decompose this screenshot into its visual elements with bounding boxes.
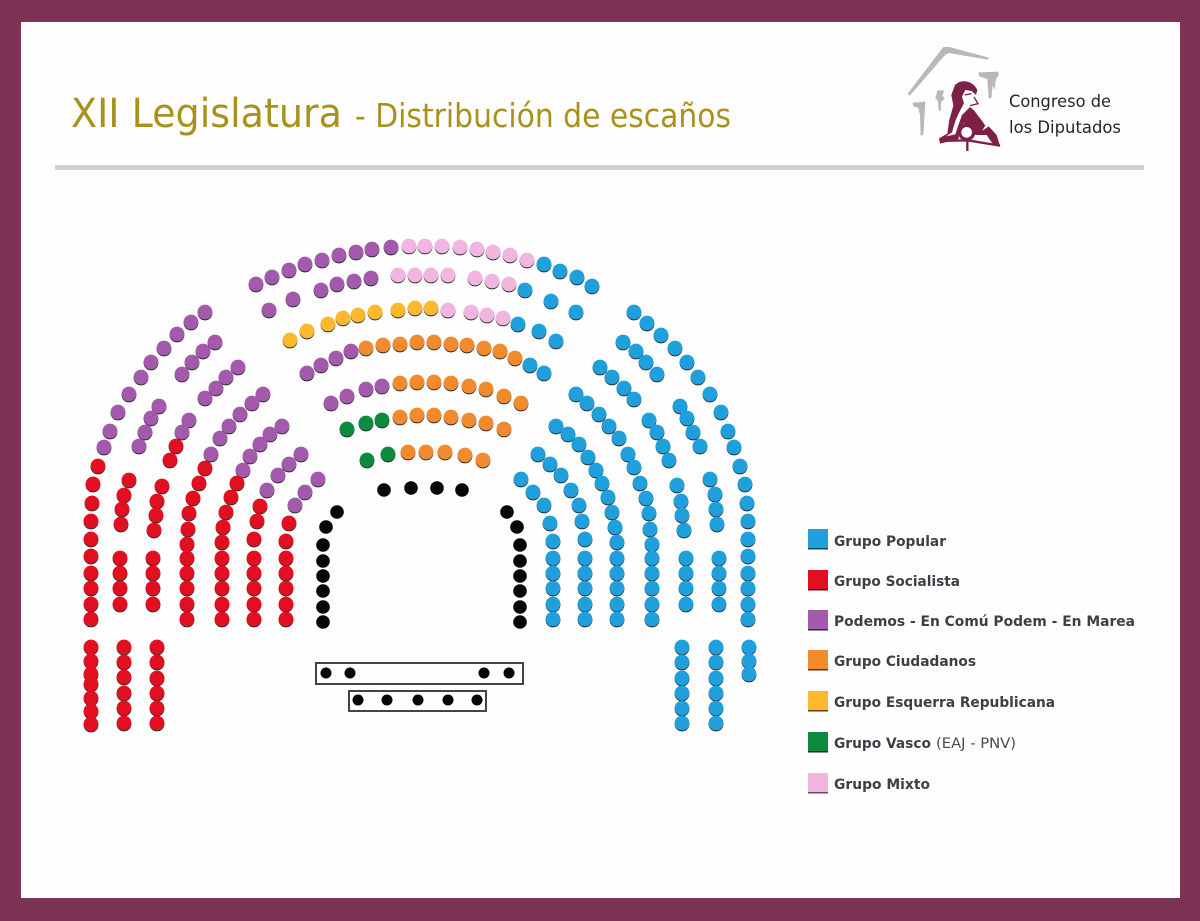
- logo text line 2: los Diputados: [1009, 118, 1121, 138]
- legend: Grupo Mixto: Grupo Mixto: [834, 777, 930, 793]
- legend: Grupo Esquerra Republicana: [808, 691, 1055, 712]
- legend: Grupo Vasco: Grupo Vasco: [834, 736, 931, 752]
- hemicycle seating chart: [84, 239, 756, 731]
- legend: Grupo Popular: [808, 529, 946, 550]
- logo roof and columns: [908, 47, 999, 136]
- logo: Congreso de los Diputados: [908, 47, 1121, 151]
- legend: [808, 529, 1135, 794]
- logo text line 1: Congreso de: [1009, 92, 1111, 112]
- legend: Grupo Esquerra Republicana: Grupo Esquerra Republicana: [834, 695, 1055, 711]
- legend: Grupo Vasco: [808, 732, 1016, 752]
- seats: Grupo Esquerra Republicana: [283, 301, 438, 347]
- presiding table upper: [316, 663, 523, 684]
- legend: Grupo Mixto: [808, 773, 930, 794]
- subtitle: - Distribución de escaños: [355, 96, 731, 135]
- legend: Grupo Ciudadanos: [808, 650, 976, 670]
- seats: Podemos - En Comú Podem - En Marea: [97, 240, 398, 512]
- legend: Grupo Ciudadanos: Grupo Ciudadanos: [834, 654, 976, 670]
- logo lion: [939, 81, 1000, 151]
- legend: Grupo Socialista: [808, 570, 960, 590]
- legend: Grupo Socialista: Grupo Socialista: [834, 574, 960, 590]
- seats: Grupo Socialista: [84, 439, 296, 731]
- presiding table lower: [349, 691, 486, 711]
- legend: Grupo Popular: Grupo Popular: [834, 534, 946, 550]
- legend: Podemos: Podemos - En Comú Podem - En Marea: [834, 614, 1135, 630]
- seats: Grupo Mixto: [391, 239, 534, 325]
- seats: Grupo Vasco: [340, 413, 395, 467]
- seats: government benches (black): [316, 481, 527, 629]
- seats: Grupo Popular: [511, 257, 756, 730]
- seats: Grupo Ciudadanos: [359, 335, 528, 467]
- legend: Grupo Vasco: (EAJ - PNV): [936, 736, 1016, 752]
- title: XII Legislatura: [71, 91, 342, 137]
